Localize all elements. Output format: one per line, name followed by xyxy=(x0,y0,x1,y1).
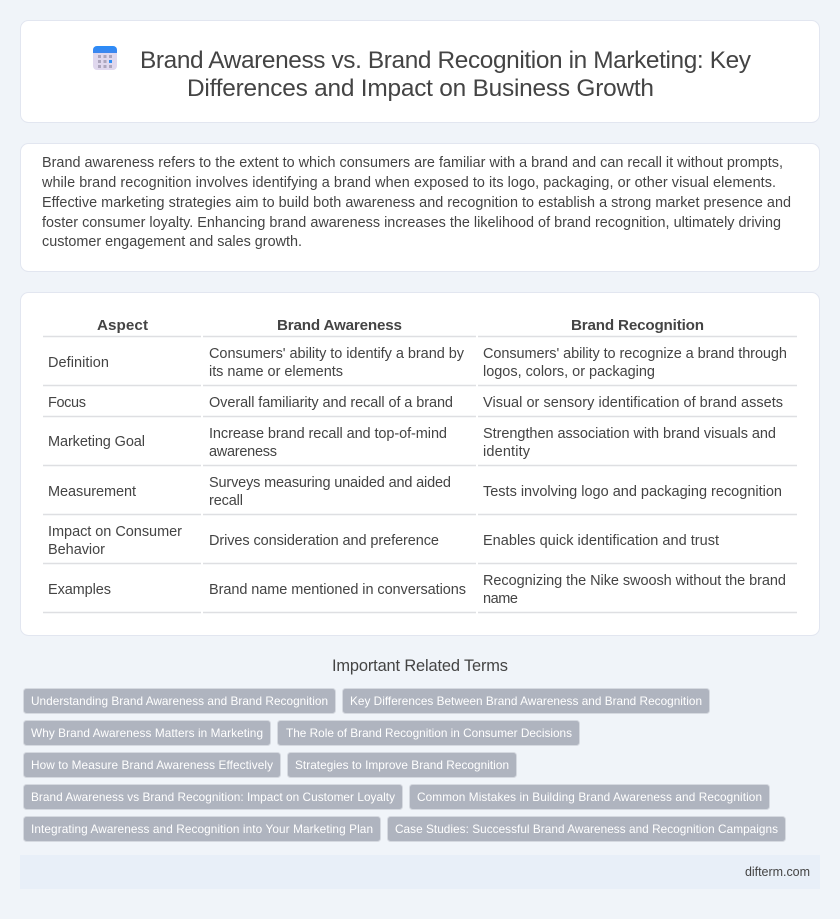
tag: Strategies to Improve Brand Recognition xyxy=(295,758,509,772)
panel: summary text xyxy=(20,144,820,272)
row: Marketing Goal: identity xyxy=(483,444,531,460)
row: Marketing Goal: Strengthen association with brand visuals and xyxy=(483,426,776,442)
tag xyxy=(342,688,710,714)
row: Measurement: Tests involving logo and packaging recognition xyxy=(483,484,782,500)
row: Examples: Brand name mentioned in conversations xyxy=(209,582,466,598)
row: Marketing Goal: awareness xyxy=(209,444,277,460)
tag xyxy=(24,752,280,778)
related term tags xyxy=(24,688,786,842)
panel: summary text: customer engagement and sales growth. xyxy=(42,234,302,250)
footer site name: difterm.com xyxy=(745,865,810,879)
row: Measurement: recall xyxy=(209,493,243,509)
row: Definition: its name or elements xyxy=(209,364,343,380)
tag xyxy=(24,816,380,842)
tag: How to Measure Brand Awareness Effectively xyxy=(31,758,273,772)
row: Focus: Focus xyxy=(48,395,86,411)
panel: summary text: Effective marketing strategies aim to build both awareness and recognition to establish a strong market presence and xyxy=(42,195,791,211)
panel: summary text: foster consumer loyalty. Enhancing brand awareness increases the likelihood of brand recognition, ultimately driving xyxy=(42,215,781,231)
row: Marketing Goal: Increase brand recall and top-of-mind xyxy=(209,426,447,442)
row: Focus: Visual or sensory identification of brand assets xyxy=(483,395,783,411)
row: Definition: Consumers' ability to recognize a brand through xyxy=(483,346,787,362)
row: Focus: Overall familiarity and recall of a brand xyxy=(209,395,453,411)
row: Definition xyxy=(43,346,797,386)
table header: Brand Awareness xyxy=(277,317,402,334)
header panel xyxy=(20,20,820,122)
tag xyxy=(24,720,270,746)
tag xyxy=(288,752,516,778)
title: Differences and Impact on Business Growth xyxy=(187,75,654,102)
tag: Case Studies: Successful Brand Awareness and Recognition Campaigns xyxy=(395,822,778,836)
table header: Brand Recognition xyxy=(571,317,704,334)
row: Marketing Goal: Marketing Goal xyxy=(48,434,145,450)
table header: Aspect xyxy=(97,317,148,334)
row: Examples xyxy=(43,573,797,612)
tag: Integrating Awareness and Recognition into Your Marketing Plan xyxy=(31,822,373,836)
row: Impact on Consumer Behavior: Impact on Consumer xyxy=(48,524,182,540)
footer bar xyxy=(20,855,820,889)
tag xyxy=(388,816,786,842)
row: Impact on Consumer Behavior xyxy=(43,524,797,564)
tag: Understanding Brand Awareness and Brand Recognition xyxy=(31,694,328,708)
tag xyxy=(24,688,336,714)
row: Measurement: Measurement xyxy=(48,484,136,500)
row: Definition: Definition xyxy=(48,355,109,371)
row: Definition: logos, colors, or packaging xyxy=(483,364,655,380)
tag xyxy=(278,720,580,746)
title: Brand Awareness vs. Brand Recognition in Marketing: Key xyxy=(140,47,752,74)
panel: comparison table xyxy=(20,292,820,636)
tag: Why Brand Awareness Matters in Marketing xyxy=(31,726,263,740)
tag: Common Mistakes in Building Brand Awareness and Recognition xyxy=(417,790,762,804)
row: Marketing Goal xyxy=(43,426,797,466)
row: Definition: Consumers' ability to identify a brand by xyxy=(209,346,465,362)
tag: Key Differences Between Brand Awareness and Brand Recognition xyxy=(350,694,702,708)
icon: calendar xyxy=(93,46,117,70)
heading: related terms: Important Related Terms xyxy=(332,657,508,675)
row: Impact on Consumer Behavior: Behavior xyxy=(48,542,105,558)
row: Examples: Recognizing the Nike swoosh without the brand xyxy=(483,573,786,589)
row: Measurement xyxy=(43,475,797,514)
tag: The Role of Brand Recognition in Consumer Decisions xyxy=(286,726,572,740)
panel: summary text: Brand awareness refers to the extent to which consumers are familiar with a brand and can recall it without prompts, xyxy=(42,155,783,171)
tag xyxy=(410,784,770,810)
tag xyxy=(24,784,402,810)
row: Focus xyxy=(43,395,797,416)
row: Impact on Consumer Behavior: Enables quick identification and trust xyxy=(483,533,719,549)
panel: summary text: while brand recognition involves identifying a brand when exposed to its logo, packaging, or other visual elements. xyxy=(41,175,776,191)
row: Examples: name xyxy=(483,591,518,607)
table header xyxy=(43,317,797,336)
title xyxy=(140,47,752,102)
tag: Brand Awareness vs Brand Recognition: Impact on Customer Loyalty xyxy=(31,790,395,804)
row: Impact on Consumer Behavior: Drives consideration and preference xyxy=(209,533,439,549)
row: Examples: Examples xyxy=(48,582,111,598)
row: Measurement: Surveys measuring unaided and aided xyxy=(209,475,451,491)
